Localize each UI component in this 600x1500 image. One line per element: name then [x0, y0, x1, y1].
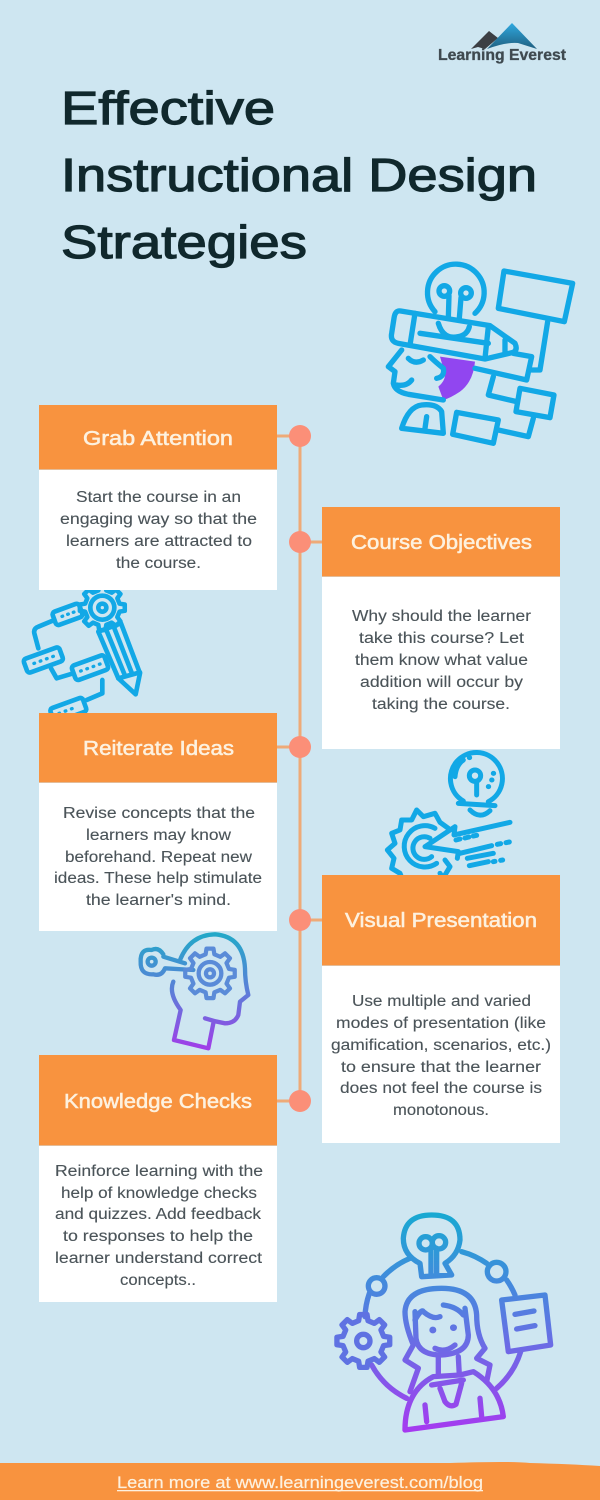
panel: Reiterate Ideas: Revise concepts that the: [63, 805, 255, 822]
panel: Visual Presentation: Use multiple and varied: [352, 993, 531, 1010]
panel: Knowledge Checks: concepts..: [120, 1272, 196, 1289]
icon: woman with bulb, gear and document: [337, 1215, 551, 1430]
panel: Reiterate Ideas: ideas. These help stimulate: [54, 870, 262, 887]
panel: Grab Attention: the course.: [116, 555, 201, 572]
panel: Knowledge Checks: Knowledge Checks: [64, 1091, 252, 1113]
panel: Visual Presentation: to ensure that the learner: [341, 1059, 541, 1076]
panel: Reiterate Ideas: the learner's mind.: [86, 892, 231, 909]
panel: Grab Attention: learners are attracted to: [66, 533, 252, 550]
panel: Grab Attention: [39, 405, 277, 590]
panel: Course Objectives: take this course? Let: [359, 630, 525, 647]
panel: Course Objectives: Why should the learner: [352, 608, 531, 625]
panel: Knowledge Checks: and quizzes. Add feedback: [55, 1206, 261, 1223]
panel: Visual Presentation: [322, 875, 560, 1143]
timeline: [277, 425, 322, 1112]
panel: Knowledge Checks: learner understand correct: [55, 1250, 263, 1267]
panel: Reiterate Ideas: [39, 713, 277, 931]
logo: Learning Everest: [438, 23, 567, 64]
panel: Knowledge Checks: help of knowledge checks: [61, 1185, 257, 1202]
panel: Grab Attention: engaging way so that the: [60, 511, 257, 528]
panel: Visual Presentation: gamification, scenarios, etc.): [331, 1037, 551, 1054]
panel: Grab Attention: Start the course in an: [76, 489, 241, 506]
panel: Course Objectives: taking the course.: [372, 696, 510, 713]
panel: Course Objectives: [322, 507, 560, 749]
panel: Reiterate Ideas: beforehand. Repeat new: [65, 849, 253, 866]
panel: Knowledge Checks: to responses to help the: [63, 1228, 253, 1245]
panel: Knowledge Checks: [39, 1055, 277, 1302]
title: Effective: [61, 82, 275, 134]
icon: head with lightbulb and pencil: [388, 264, 573, 443]
footer banner: [0, 1462, 600, 1500]
panel: Knowledge Checks: Reinforce learning with the: [55, 1163, 263, 1180]
title: Strategies: [61, 216, 307, 268]
panel: Visual Presentation: does not feel the course is: [340, 1080, 542, 1097]
panel: Reiterate Ideas: learners may know: [86, 827, 232, 844]
panel: Grab Attention: Grab Attention: [83, 428, 233, 450]
logo: Learning Everest: Learning Everest: [438, 47, 567, 64]
icon: lightbulb and target gear: [387, 753, 510, 882]
panel: Course Objectives: Course Objectives: [351, 532, 532, 554]
title: [61, 82, 537, 268]
panel: Visual Presentation: modes of presentation (like: [336, 1015, 546, 1032]
icon: head with gear and key: [141, 934, 248, 1048]
panel: Visual Presentation: Visual Presentation: [345, 910, 537, 932]
panel: Visual Presentation: monotonous.: [393, 1102, 489, 1119]
panel: Course Objectives: addition will occur by: [360, 674, 523, 691]
panel: Reiterate Ideas: Reiterate Ideas: [83, 738, 234, 760]
title: Instructional Design: [61, 149, 537, 201]
footer banner: Learn more at www.learningeverest.com/blog: [117, 1473, 483, 1492]
panel: Course Objectives: them know what value: [355, 652, 528, 669]
icon: gear, pencil and connected blocks: [23, 585, 140, 723]
